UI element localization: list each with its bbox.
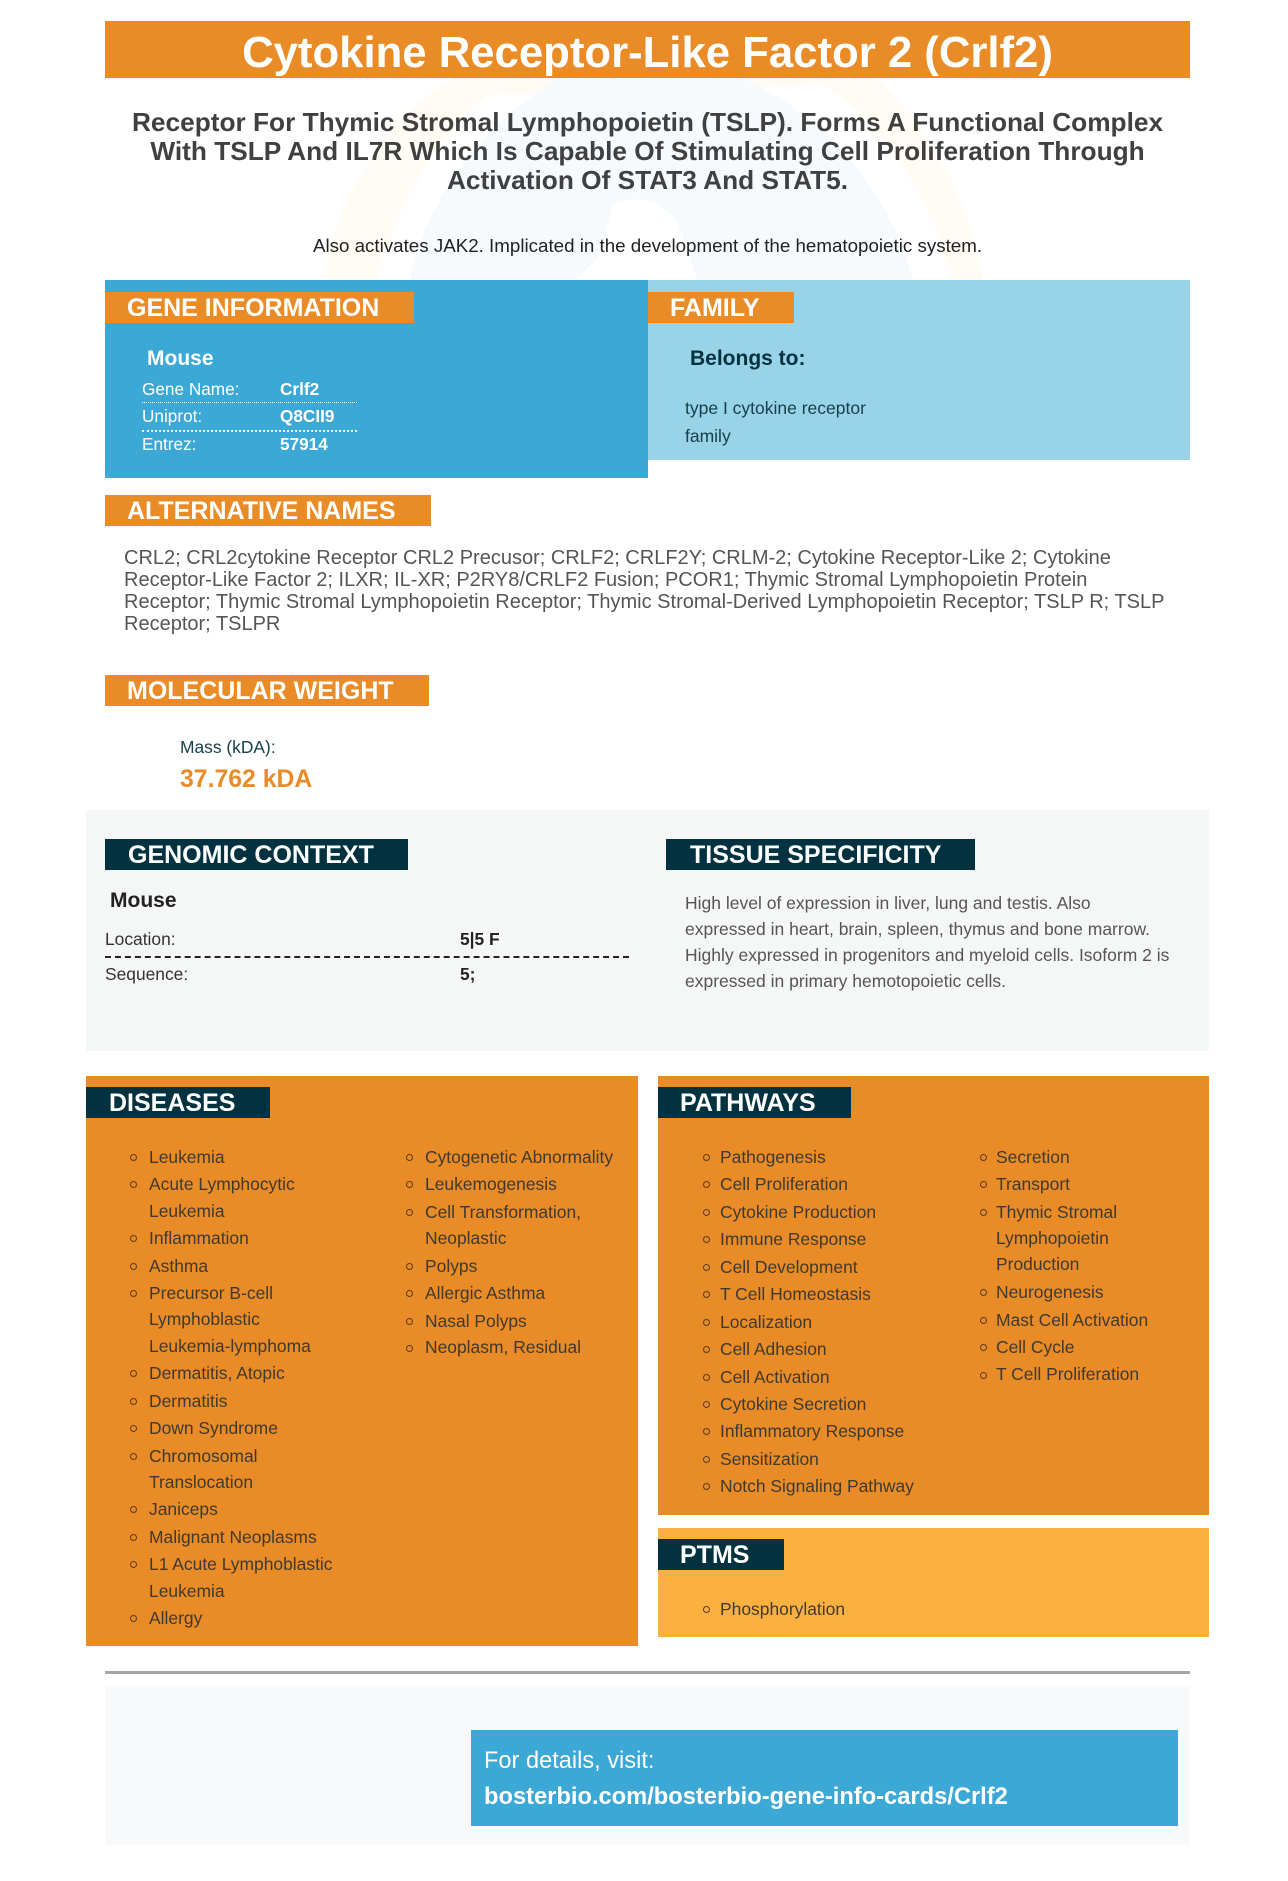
diseases list column 2: Cytogenetic Abnormality (425, 1147, 613, 1167)
callout label: For details, visit: (484, 1748, 654, 1774)
alternative names text: Receptor-Like Factor 2; ILXR; IL-XR; P2RY8/CRLF2 Fusion; PCOR1; Thymic Stromal Lymphopoietin Protein (124, 569, 1087, 591)
diseases list column 1: Malignant Neoplasms (149, 1527, 317, 1547)
diseases list column 1: Acute Lymphocytic (149, 1174, 295, 1194)
tissue specificity text: expressed in primary hemotopoietic cells. (685, 971, 1006, 991)
uniprot row: Q8CII9 (280, 406, 334, 426)
entrez row: Entrez: (142, 434, 196, 454)
diseases list column 1: L1 Acute Lymphoblastic (149, 1554, 333, 1574)
diseases list column 1: Leukemia (149, 1147, 225, 1167)
pathways list column 1: Cytokine Secretion (720, 1394, 866, 1414)
entrez row (142, 434, 328, 454)
species label: Mouse (110, 889, 177, 912)
diseases heading: DISEASES (109, 1089, 235, 1117)
diseases list column 1: Janiceps (149, 1499, 218, 1519)
pathways list column 2: Neurogenesis (996, 1282, 1104, 1302)
sequence row: 5; (460, 964, 475, 984)
diseases list column 2: Nasal Polyps (425, 1311, 527, 1331)
tissue specificity text: High level of expression in liver, lung and testis. Also (685, 893, 1091, 913)
pathways heading: PATHWAYS (680, 1089, 816, 1117)
ptms list: Phosphorylation (720, 1599, 845, 1619)
diseases list column 1: Asthma (149, 1256, 208, 1276)
panel: footer (105, 1686, 1190, 1845)
pathways list column 2: Secretion (996, 1147, 1070, 1167)
uniprot row (142, 406, 357, 432)
pathways list column 2 (980, 1147, 1148, 1384)
pathways list column 2: Lymphopoietin (996, 1228, 1109, 1248)
family text (685, 398, 866, 446)
tissue specificity heading: TISSUE SPECIFICITY (690, 841, 941, 869)
sequence row (105, 964, 475, 984)
diseases heading (86, 1087, 270, 1118)
location row: 5|5 F (460, 929, 500, 949)
pathways list column 2: Cell Cycle (996, 1337, 1074, 1357)
alternative names text (124, 547, 1164, 635)
diseases list column 1: Dermatitis, Atopic (149, 1363, 285, 1383)
pathways list column 2: Production (996, 1254, 1079, 1274)
diseases list column 1: Leukemia (149, 1581, 225, 1601)
diseases list column 1: Chromosomal (149, 1446, 258, 1466)
callout: details link (471, 1730, 1178, 1826)
pathways list column 2: Transport (996, 1174, 1070, 1194)
panel: family (648, 280, 1190, 460)
pathways list column 1: Notch Signaling Pathway (720, 1476, 914, 1496)
mass label: Mass (kDA): (180, 737, 276, 757)
pathways list column 2: T Cell Proliferation (996, 1364, 1139, 1384)
pathways list column 1: Sensitization (720, 1449, 819, 1469)
sequence row: Sequence: (105, 964, 188, 984)
diseases list column 2: Leukemogenesis (425, 1174, 557, 1194)
diseases list column 2: Neoplastic (425, 1228, 506, 1248)
diseases list column 1: Precursor B-cell (149, 1283, 273, 1303)
ptms heading (658, 1539, 784, 1570)
entrez row: 57914 (280, 434, 328, 454)
background watermark logo (323, 78, 983, 280)
alternative names text: Receptor; Thymic Stromal Lymphopoietin Receptor; Thymic Stromal-Derived Lymphopoietin Receptor; TSLP R; TSLP (124, 591, 1164, 613)
title (105, 21, 1190, 78)
pathways list column 2: Thymic Stromal (996, 1202, 1117, 1222)
family text: type I cytokine receptor (685, 398, 866, 418)
diseases list column 1 (130, 1147, 333, 1628)
alternative names text: CRL2; CRL2cytokine Receptor CRL2 Precusor; CRLF2; CRLF2Y; CRLM-2; Cytokine Receptor-Like 2; Cytokine (124, 547, 1111, 569)
subtitle (132, 107, 1163, 195)
pathways list column 1: Localization (720, 1312, 812, 1332)
subtitle: Activation Of STAT3 And STAT5. (447, 165, 848, 195)
species label: Mouse (147, 347, 214, 370)
location row (105, 928, 629, 958)
panel: gene information (105, 280, 648, 478)
title: Cytokine Receptor-Like Factor 2 (Crlf2) (242, 28, 1053, 77)
diseases list column 2: Allergic Asthma (425, 1283, 545, 1303)
diseases list column 1: Inflammation (149, 1228, 249, 1248)
gene name row (142, 379, 357, 403)
gene name row: Crlf2 (280, 379, 319, 399)
pathways list column 1 (703, 1147, 914, 1496)
callout url: bosterbio.com/bosterbio-gene-info-cards/Crlf2 (484, 1784, 1008, 1810)
panel: genomic context and tissue specificity (86, 810, 1209, 1051)
diseases list column 1: Down Syndrome (149, 1418, 278, 1438)
tissue specificity text: expressed in heart, brain, spleen, thymus and bone marrow. (685, 919, 1150, 939)
diseases list column 1: Lymphoblastic (149, 1309, 260, 1329)
molecular weight heading: MOLECULAR WEIGHT (127, 677, 394, 705)
family heading (648, 292, 794, 323)
diseases list column 1: Allergy (149, 1608, 202, 1628)
panel: pathways (658, 1076, 1209, 1515)
pathways list column 1: Inflammatory Response (720, 1421, 904, 1441)
alternative names text: Receptor; TSLPR (124, 613, 280, 635)
tissue specificity text: Highly expressed in progenitors and myeloid cells. Isoform 2 is (685, 945, 1169, 965)
panel: diseases (86, 1076, 638, 1646)
pathways list column 1: Cell Activation (720, 1367, 830, 1387)
subtitle: With TSLP And IL7R Which Is Capable Of Stimulating Cell Proliferation Through (150, 136, 1145, 166)
diseases list column 1: Translocation (149, 1472, 253, 1492)
uniprot row: Uniprot: (142, 406, 202, 426)
family text: family (685, 426, 731, 446)
diseases list column 1: Leukemia-lymphoma (149, 1336, 311, 1356)
alternative names heading: ALTERNATIVE NAMES (127, 497, 396, 525)
pathways list column 1: Cytokine Production (720, 1202, 876, 1222)
diseases list column 2 (406, 1147, 613, 1357)
diseases list column 1: Dermatitis (149, 1391, 227, 1411)
genomic context heading: GENOMIC CONTEXT (128, 841, 374, 869)
gene information heading: GENE INFORMATION (127, 294, 379, 322)
ptms heading: PTMS (680, 1541, 749, 1569)
panel: ptms (658, 1528, 1209, 1637)
tissue specificity text (685, 893, 1169, 991)
pathways list column 1: Cell Development (720, 1257, 858, 1277)
diseases list column 2: Cell Transformation, (425, 1202, 581, 1222)
pathways list column 2: Mast Cell Activation (996, 1310, 1148, 1330)
pathways list column 1: Cell Proliferation (720, 1174, 848, 1194)
pathways list column 1: T Cell Homeostasis (720, 1284, 871, 1304)
description: Also activates JAK2. Implicated in the development of the hematopoietic system. (313, 235, 982, 256)
pathways list column 1: Pathogenesis (720, 1147, 826, 1167)
gene name row: Gene Name: (142, 379, 239, 399)
diseases list column 2: Neoplasm, Residual (425, 1337, 581, 1357)
pathways list column 1: Cell Adhesion (720, 1339, 827, 1359)
belongs to label: Belongs to: (690, 347, 806, 370)
subtitle: Receptor For Thymic Stromal Lymphopoietin (TSLP). Forms A Functional Complex (132, 107, 1163, 137)
pathways heading (658, 1087, 851, 1118)
pathways list column 1: Immune Response (720, 1229, 866, 1249)
diseases list column 1: Leukemia (149, 1201, 225, 1221)
location row: Location: (105, 929, 176, 949)
family heading: FAMILY (670, 294, 759, 322)
diseases list column 2: Polyps (425, 1256, 477, 1276)
mass value: 37.762 kDA (180, 766, 312, 793)
